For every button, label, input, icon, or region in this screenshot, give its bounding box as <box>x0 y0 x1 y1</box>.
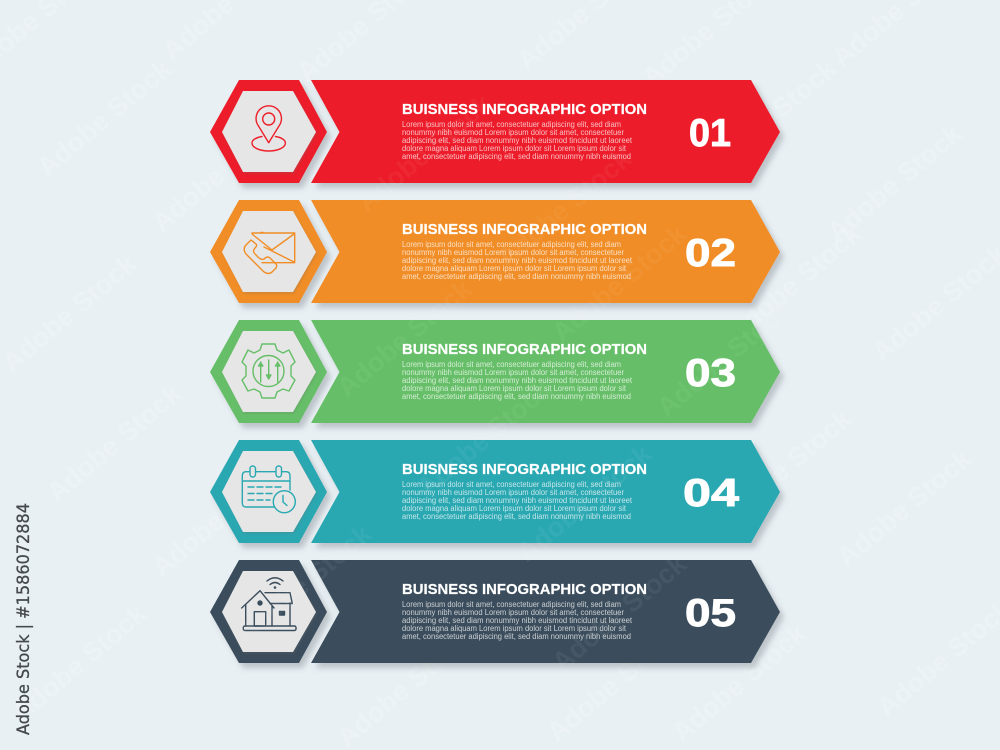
hexagon inner 3 <box>222 331 316 412</box>
body text 2 <box>402 240 633 281</box>
watermark pattern: Adobe Stock <box>146 453 293 583</box>
icon: map pin <box>252 106 285 151</box>
watermark pattern: Adobe Stock <box>31 53 178 183</box>
body text 5: dolore magna aliquam Lorem ipsum dolor sit Lorem ipsum dolor sit <box>402 624 627 633</box>
icon: smart home <box>242 578 296 630</box>
watermark over banners: Adobe Stock <box>491 143 638 273</box>
watermark pattern: Adobe Stock <box>0 248 143 378</box>
watermark pattern: Adobe Stock <box>821 118 968 248</box>
body text 4: amet, consectetuer adipiscing elit, sed diam nonummy nibh euismod <box>402 512 631 521</box>
icon: envelope and phone <box>244 232 295 273</box>
banner 3 <box>311 320 780 423</box>
watermark pattern: Adobe Stock <box>831 443 978 573</box>
body text 1: amet, consectetuer adipiscing elit, sed diam nonummy nibh euismod <box>402 152 631 161</box>
body text 5: Lorem ipsum dolor sit amet, consectetuer adipiscing elit, sed diam <box>402 600 621 609</box>
body text 3: nonummy nibh euismod Lorem ipsum dolor sit amet, consectetuer <box>402 368 624 377</box>
hexagon inner 1 <box>222 91 316 172</box>
vertical credit text: Adobe Stock | #1586072884 <box>14 503 34 735</box>
body text 5: amet, consectetuer adipiscing elit, sed diam nonummy nibh euismod <box>402 632 631 641</box>
body text 4: adipiscing elit, sed diam nonummy nibh euismod tincidunt ut laoreet <box>402 496 633 505</box>
banner 2 <box>311 200 780 303</box>
watermark pattern: Adobe Stock <box>146 108 293 238</box>
watermark pattern: Adobe Stock <box>6 598 153 728</box>
heading 4: BUISNESS INFOGRAPHIC OPTION <box>402 461 647 478</box>
row 2: orange option <box>210 200 780 303</box>
number 02: 02 <box>685 232 736 275</box>
row 4: teal option <box>210 440 780 543</box>
hexagon inner 2 <box>222 211 316 292</box>
body text 2: dolore magna aliquam Lorem ipsum dolor sit Lorem ipsum dolor sit <box>402 264 627 273</box>
number 03: 03 <box>685 352 736 395</box>
body text 3: Lorem ipsum dolor sit amet, consectetuer adipiscing elit, sed diam <box>402 360 621 369</box>
watermark pattern: Adobe Stock <box>331 623 478 750</box>
watermark pattern: Adobe Stock <box>721 218 868 348</box>
body text 1 <box>402 120 633 161</box>
banner 4 <box>311 440 780 543</box>
watermark over banners: Adobe Stock <box>546 218 693 348</box>
body text 3 <box>402 360 633 401</box>
body text 1: dolore magna aliquam Lorem ipsum dolor sit Lorem ipsum dolor sit <box>402 144 627 153</box>
body text 1: Lorem ipsum dolor sit amet, consectetuer adipiscing elit, sed diam <box>402 120 621 129</box>
watermark over banners: Adobe Stock <box>231 518 378 648</box>
hexagon inner 5 <box>222 571 316 652</box>
body text 2: adipiscing elit, sed diam nonummy nibh euismod tincidunt ut laoreet <box>402 256 633 265</box>
body text 4 <box>402 480 633 521</box>
heading 3: BUISNESS INFOGRAPHIC OPTION <box>402 341 647 358</box>
watermark over banners <box>231 88 798 678</box>
body text 4: dolore magna aliquam Lorem ipsum dolor sit Lorem ipsum dolor sit <box>402 504 627 513</box>
banner 1 <box>311 80 780 183</box>
body text 2: nonummy nibh euismod Lorem ipsum dolor sit amet, consectetuer <box>402 248 624 257</box>
hexagon frame 2 <box>210 200 327 303</box>
watermark over banners: Adobe Stock <box>511 438 658 568</box>
icon: gear with sliders <box>242 344 295 398</box>
banner 5 <box>311 560 780 663</box>
watermark over banners: Adobe Stock <box>351 88 498 218</box>
watermark over banners: Adobe Stock <box>331 273 478 403</box>
body text 4: Lorem ipsum dolor sit amet, consectetuer adipiscing elit, sed diam <box>402 480 621 489</box>
watermark pattern: Adobe Stock <box>541 618 688 748</box>
body text 1: adipiscing elit, sed diam nonummy nibh euismod tincidunt ut laoreet <box>402 136 633 145</box>
hexagon frame 4 <box>210 440 327 543</box>
number 04: 04 <box>683 472 739 515</box>
watermark over banners: Adobe Stock <box>411 373 558 503</box>
watermark over banners: Adobe Stock <box>546 548 693 678</box>
body text 5: adipiscing elit, sed diam nonummy nibh euismod tincidunt ut laoreet <box>402 616 633 625</box>
body text 1: nonummy nibh euismod Lorem ipsum dolor sit amet, consectetuer <box>402 128 624 137</box>
body text 4: nonummy nibh euismod Lorem ipsum dolor sit amet, consectetuer <box>402 488 624 497</box>
body text 3: adipiscing elit, sed diam nonummy nibh euismod tincidunt ut laoreet <box>402 376 633 385</box>
heading 5: BUISNESS INFOGRAPHIC OPTION <box>402 581 647 598</box>
body text 2: amet, consectetuer adipiscing elit, sed diam nonummy nibh euismod <box>402 272 631 281</box>
watermark over banners: Adobe Stock <box>651 293 798 423</box>
body text 2: Lorem ipsum dolor sit amet, consectetuer adipiscing elit, sed diam <box>402 240 621 249</box>
row 1: red option <box>210 80 780 183</box>
hexagon inner 4 <box>222 451 316 532</box>
hexagon frame 3 <box>210 320 327 423</box>
icon: calendar with clock <box>242 466 295 513</box>
number 01: 01 <box>689 112 731 155</box>
body text 5 <box>402 600 633 641</box>
watermark pattern: Adobe Stock <box>41 378 188 508</box>
watermark pattern: Adobe Stock <box>666 618 813 748</box>
watermark pattern: Adobe Stock <box>711 403 858 533</box>
heading 1: BUISNESS INFOGRAPHIC OPTION <box>402 101 647 118</box>
row 3: green option <box>210 320 780 423</box>
number 05: 05 <box>685 592 736 635</box>
body text 3: dolore magna aliquam Lorem ipsum dolor sit Lorem ipsum dolor sit <box>402 384 627 393</box>
heading 2: BUISNESS INFOGRAPHIC OPTION <box>402 221 647 238</box>
hexagon frame 1 <box>210 80 327 183</box>
hexagon frame 5 <box>210 560 327 663</box>
watermark pattern: Adobe Stock <box>696 53 843 183</box>
row 5: navy option <box>210 560 780 663</box>
body text 5: nonummy nibh euismod Lorem ipsum dolor sit amet, consectetuer <box>402 608 624 617</box>
body text 3: amet, consectetuer adipiscing elit, sed diam nonummy nibh euismod <box>402 392 631 401</box>
